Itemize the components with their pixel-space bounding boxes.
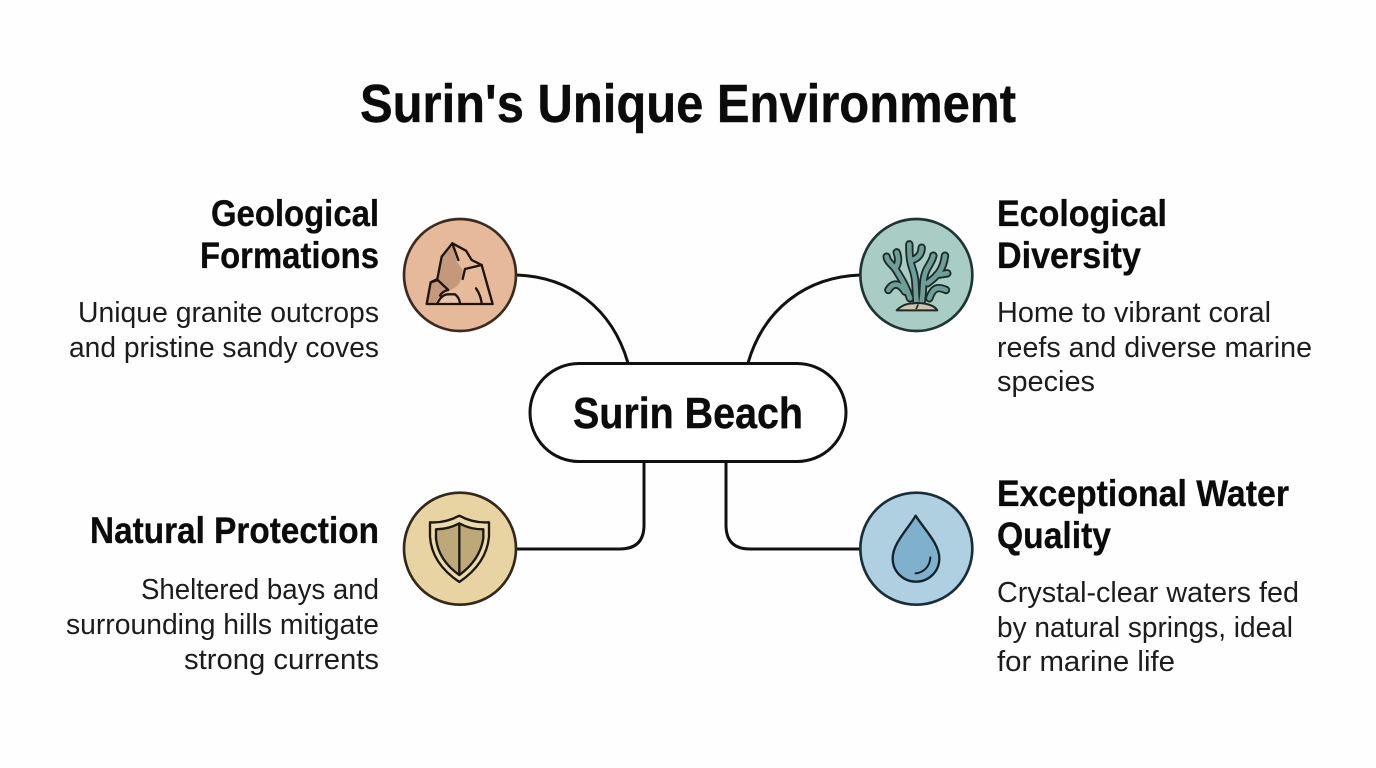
description: water: by natural springs, ideal xyxy=(997,612,1293,644)
icon: shield xyxy=(404,493,516,605)
central node: Surin Beach: Surin Beach xyxy=(573,389,803,438)
heading: Geological Formations: Formations xyxy=(200,234,379,276)
description: ecological: reefs and diverse marine xyxy=(997,332,1312,364)
description: water: Crystal-clear waters fed xyxy=(997,577,1299,609)
panel: exceptional water quality text xyxy=(997,472,1299,678)
panel: geological formations text xyxy=(69,192,379,364)
panel: ecological diversity text xyxy=(997,192,1312,398)
heading: Geological Formations xyxy=(200,192,379,276)
description: protection xyxy=(66,574,379,676)
central node: Surin Beach xyxy=(530,364,846,462)
description: ecological xyxy=(997,297,1312,398)
heading: Exceptional Water Quality: Exceptional Water xyxy=(997,472,1289,514)
icon: rock xyxy=(404,219,516,331)
description: geological: Unique granite outcrops xyxy=(78,297,379,329)
heading: Ecological Diversity: Diversity xyxy=(997,234,1141,276)
heading: Geological Formations: Geological xyxy=(211,192,379,234)
heading: Natural Protection: Natural Protection xyxy=(90,509,379,551)
description: protection: Sheltered bays and xyxy=(141,574,379,606)
heading: Exceptional Water Quality xyxy=(997,472,1289,556)
icon: water drop xyxy=(860,493,972,605)
description: ecological: Home to vibrant coral xyxy=(997,297,1271,329)
panel: natural protection text xyxy=(66,509,379,676)
description: water xyxy=(997,577,1299,678)
description: water: for marine life xyxy=(997,646,1175,678)
heading: Exceptional Water Quality: Quality xyxy=(997,514,1111,556)
description: geological xyxy=(69,297,379,364)
heading: Ecological Diversity: Ecological xyxy=(997,192,1167,234)
icon: coral xyxy=(860,219,972,331)
description: protection: surrounding hills mitigate xyxy=(66,609,379,641)
description: geological: and pristine sandy coves xyxy=(69,332,379,364)
connectors xyxy=(517,275,860,549)
description: protection: strong currents xyxy=(184,644,379,676)
title: Surin's Unique Environment xyxy=(360,75,1016,134)
description: ecological: species xyxy=(997,366,1095,398)
heading: Ecological Diversity xyxy=(997,192,1167,276)
